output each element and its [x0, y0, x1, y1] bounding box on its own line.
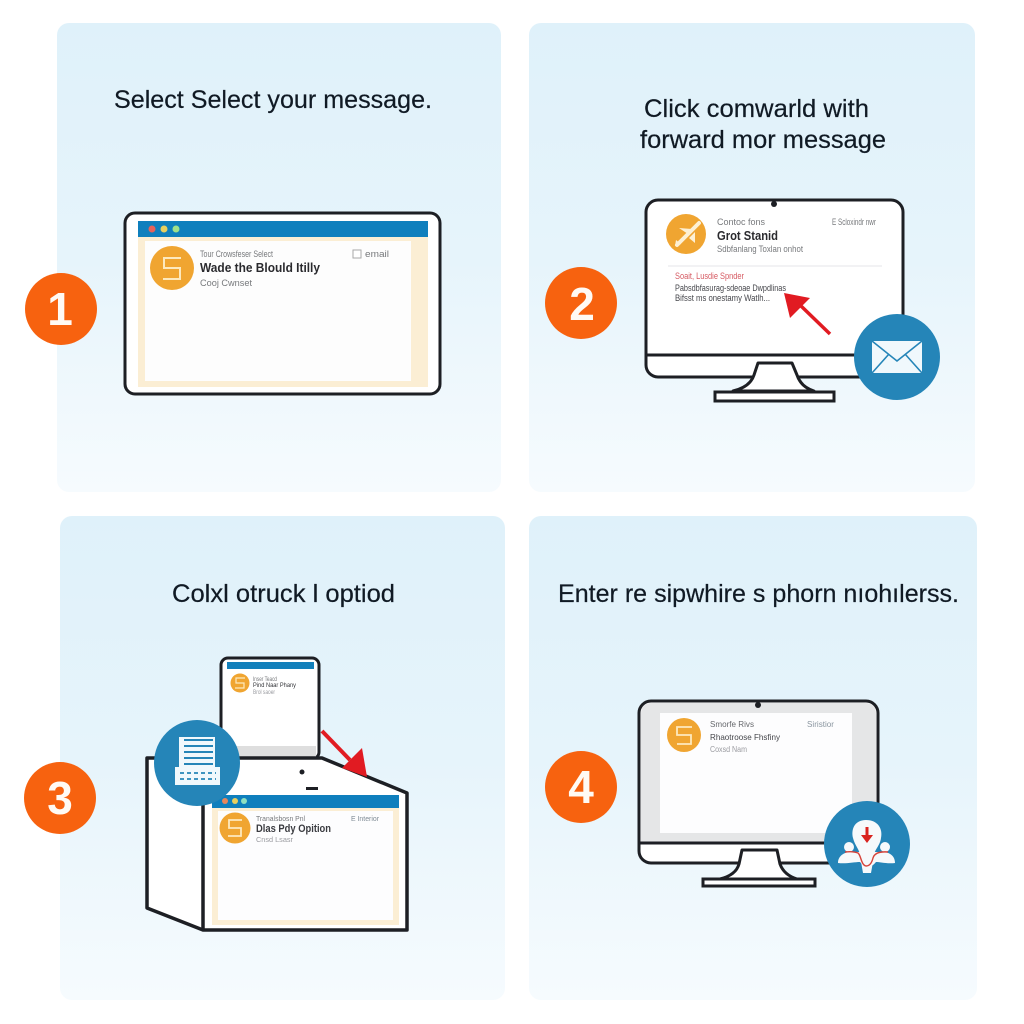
- illustration: tablet: [221, 658, 319, 759]
- message text: Tranalsbosn Pnl: [256, 814, 305, 823]
- message text: [200, 249, 320, 288]
- badge: number 1: [25, 273, 97, 345]
- heading: step 2: forward mor message: [640, 126, 886, 154]
- panel: step 3: [24, 516, 505, 1000]
- message text: Sdbfanlang Toxlan onhot: [717, 244, 803, 254]
- message text: Siristior: [807, 720, 834, 729]
- message text: [717, 217, 876, 254]
- forwarded message text: [675, 271, 786, 303]
- arrow: red pointer: [322, 731, 367, 777]
- icon: orange plane avatar: [666, 214, 706, 254]
- heading: step 4: Enter re sipwhire s phorn nıohılerss.: [558, 580, 959, 608]
- forwarded message text: Bifsst ms onestamy Watlh...: [675, 293, 770, 303]
- heading: step 3: Colxl otruck l optiod: [172, 580, 395, 608]
- illustration: desktop monitor: [639, 701, 910, 887]
- message text: E Scloxindr nwr: [832, 217, 876, 227]
- icon: location person badge: [824, 801, 910, 887]
- badge: number 2: 2: [569, 278, 595, 330]
- message text: [710, 720, 834, 754]
- heading: step 1: Select Select your message.: [114, 86, 432, 114]
- checkbox and label: [353, 249, 389, 259]
- icon: orange avatar: [667, 718, 701, 752]
- panel: step 2: [529, 23, 975, 492]
- message text: Cnsd Lsasr: [256, 835, 293, 844]
- icon: orange avatar: [220, 812, 250, 844]
- heading: step 2: [640, 95, 886, 154]
- illustration: tablet: Inser Teacd: [253, 677, 277, 683]
- message text: E Interior: [351, 814, 379, 823]
- message text: Cooj Cwnset: [200, 278, 252, 288]
- illustration: browser window: [125, 213, 440, 394]
- heading: step 2: Click comwarld with: [644, 95, 869, 123]
- message text: Dlas Pdy Opition: [256, 823, 331, 835]
- forwarded message text: Soait, Lusdie Spnder: [675, 271, 744, 281]
- message text: [256, 814, 379, 844]
- checkbox and label: email: [365, 249, 389, 259]
- icon: orange avatar: [150, 246, 194, 290]
- message text: Grot Stanid: [717, 229, 778, 243]
- illustration: desktop monitor: [646, 200, 940, 401]
- panel: step 4: [529, 516, 977, 1000]
- message text: Coxsd Nam: [710, 745, 747, 754]
- message text: Wade the Blould Itilly: [200, 261, 320, 275]
- illustration: box with window: [147, 758, 407, 930]
- badge: number 3: 3: [47, 772, 73, 824]
- message text: Smorfe Rivs: [710, 720, 754, 729]
- badge: number 2: [545, 267, 617, 339]
- badge: number 3: [24, 762, 96, 834]
- badge: number 4: 4: [568, 761, 594, 813]
- panel: step 1: [25, 23, 501, 492]
- illustration: tablet: Pind Naar Phany: [253, 682, 297, 689]
- arrow: red pointer: [784, 293, 830, 334]
- message text: Contoc fons: [717, 217, 765, 227]
- icon: keyboard document badge: [154, 720, 240, 806]
- icon: envelope badge: [854, 314, 940, 400]
- badge: number 1: 1: [47, 283, 73, 335]
- forwarded message text: Pabsdbfasurag-sdeoae Dwpdlinas: [675, 283, 786, 293]
- illustration: tablet: Brol saoer: [253, 690, 275, 696]
- message text: Rhaotroose Fhsfiny: [710, 732, 781, 742]
- message text: Tour Crowsfeser Select: [200, 249, 273, 259]
- badge: number 4: [545, 751, 617, 823]
